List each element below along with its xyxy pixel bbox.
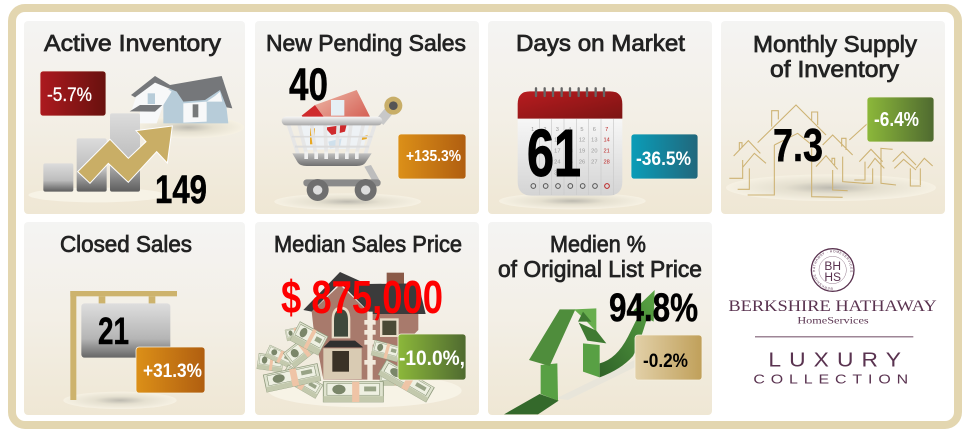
value: $ 875,000 — [281, 271, 443, 323]
value: 94.8% — [609, 286, 698, 330]
value: 21 — [98, 311, 129, 353]
heading: Days on Market — [516, 30, 686, 56]
icon: calendar: 26 — [579, 159, 585, 165]
icon: BHHS seal: BH — [824, 259, 841, 273]
icon: calendar: 10 — [554, 138, 560, 144]
change badge — [136, 347, 205, 393]
icon: calendar: 28 — [604, 159, 610, 165]
change badge: +31.3% — [143, 361, 202, 382]
change badge: -0.2% — [643, 351, 688, 372]
panel: Median % of Original List Price — [488, 222, 712, 415]
heading: Closed Sales — [60, 231, 192, 257]
icon: calendar: 1 — [531, 127, 534, 133]
icon: calendar: 6 — [593, 127, 596, 133]
icon: calendar — [499, 88, 646, 209]
money stacks — [257, 322, 434, 402]
heading — [498, 231, 702, 282]
panel: Monthly Supply of Inventory — [721, 21, 945, 214]
panel: Active Inventory — [24, 21, 245, 214]
icon: house and rising bar chart — [28, 76, 244, 202]
heading: of Inventory — [770, 56, 900, 82]
icon: calendar: 14 — [604, 138, 610, 144]
logo: Berkshire Hathaway HomeServices Luxury Collection — [728, 248, 937, 386]
change badge — [635, 335, 702, 380]
change badge — [40, 71, 106, 116]
change badge: +135.3% — [406, 148, 461, 165]
change badge: -5.7% — [47, 85, 92, 106]
change badge — [631, 134, 698, 179]
heading — [753, 31, 918, 82]
icon: calendar: 13 — [591, 138, 597, 144]
sub-brand: HomeServices — [797, 315, 869, 326]
heading: Active Inventory — [44, 30, 222, 56]
change badge — [398, 334, 466, 380]
value: 7.3 — [773, 119, 823, 171]
collection wordmark: COLLECTION — [753, 372, 914, 386]
icon: calendar: 5 — [580, 127, 584, 133]
icon: calendar: 4 — [568, 127, 571, 133]
icon: calendar: 19 — [579, 149, 585, 155]
icon: calendar: 3 — [556, 127, 559, 133]
change badge — [867, 97, 934, 142]
change badge — [398, 134, 466, 179]
icon: calendar: 18 — [567, 149, 573, 155]
heading: Median Sales Price — [274, 231, 462, 257]
change badge: -36.5% — [636, 149, 691, 170]
change badge: -10.0%, — [399, 347, 465, 370]
brand name: BERKSHIRE HATHAWAY — [728, 298, 937, 315]
icon: brick house and money — [257, 272, 462, 407]
icon: calendar: 31 — [554, 170, 560, 176]
change badge: -6.4% — [874, 109, 919, 131]
icon: calendar: 24 — [554, 159, 560, 165]
value: 61 — [527, 116, 581, 191]
panel: New Pending Sales — [255, 21, 479, 214]
heading: Monthly Supply — [753, 31, 918, 57]
heading: Medien % — [550, 231, 646, 257]
icon: BHHS seal: BERKSHIRE HATHAWAY · HOMESERVICES · — [812, 250, 853, 290]
icon: calendar: 21 — [604, 149, 610, 155]
icon: calendar: 17 — [554, 149, 560, 155]
icon: outlined houses — [726, 105, 936, 201]
icon: calendar: 2 — [543, 127, 547, 133]
icon: green arrow house — [504, 290, 655, 414]
icon: BHHS seal: HS — [824, 270, 841, 284]
icon: calendar: 20 — [591, 149, 597, 155]
panel: Closed Sales — [24, 222, 245, 415]
heading: of Original List Price — [498, 256, 702, 282]
value: 149 — [155, 168, 207, 212]
value: 40 — [289, 59, 328, 110]
panel: Days on Market — [488, 21, 712, 214]
icon: hanging sign — [63, 291, 177, 409]
icon: calendar: 25 — [567, 159, 573, 165]
panel: Median Sales Price — [255, 222, 479, 415]
heading: New Pending Sales — [266, 30, 466, 56]
icon: shopping cart with house — [274, 90, 421, 210]
luxury wordmark: LUXURY — [768, 349, 909, 372]
icon: calendar: 12 — [579, 138, 585, 144]
icon: calendar: 7 — [605, 127, 608, 133]
icon: calendar: 27 — [591, 159, 597, 165]
